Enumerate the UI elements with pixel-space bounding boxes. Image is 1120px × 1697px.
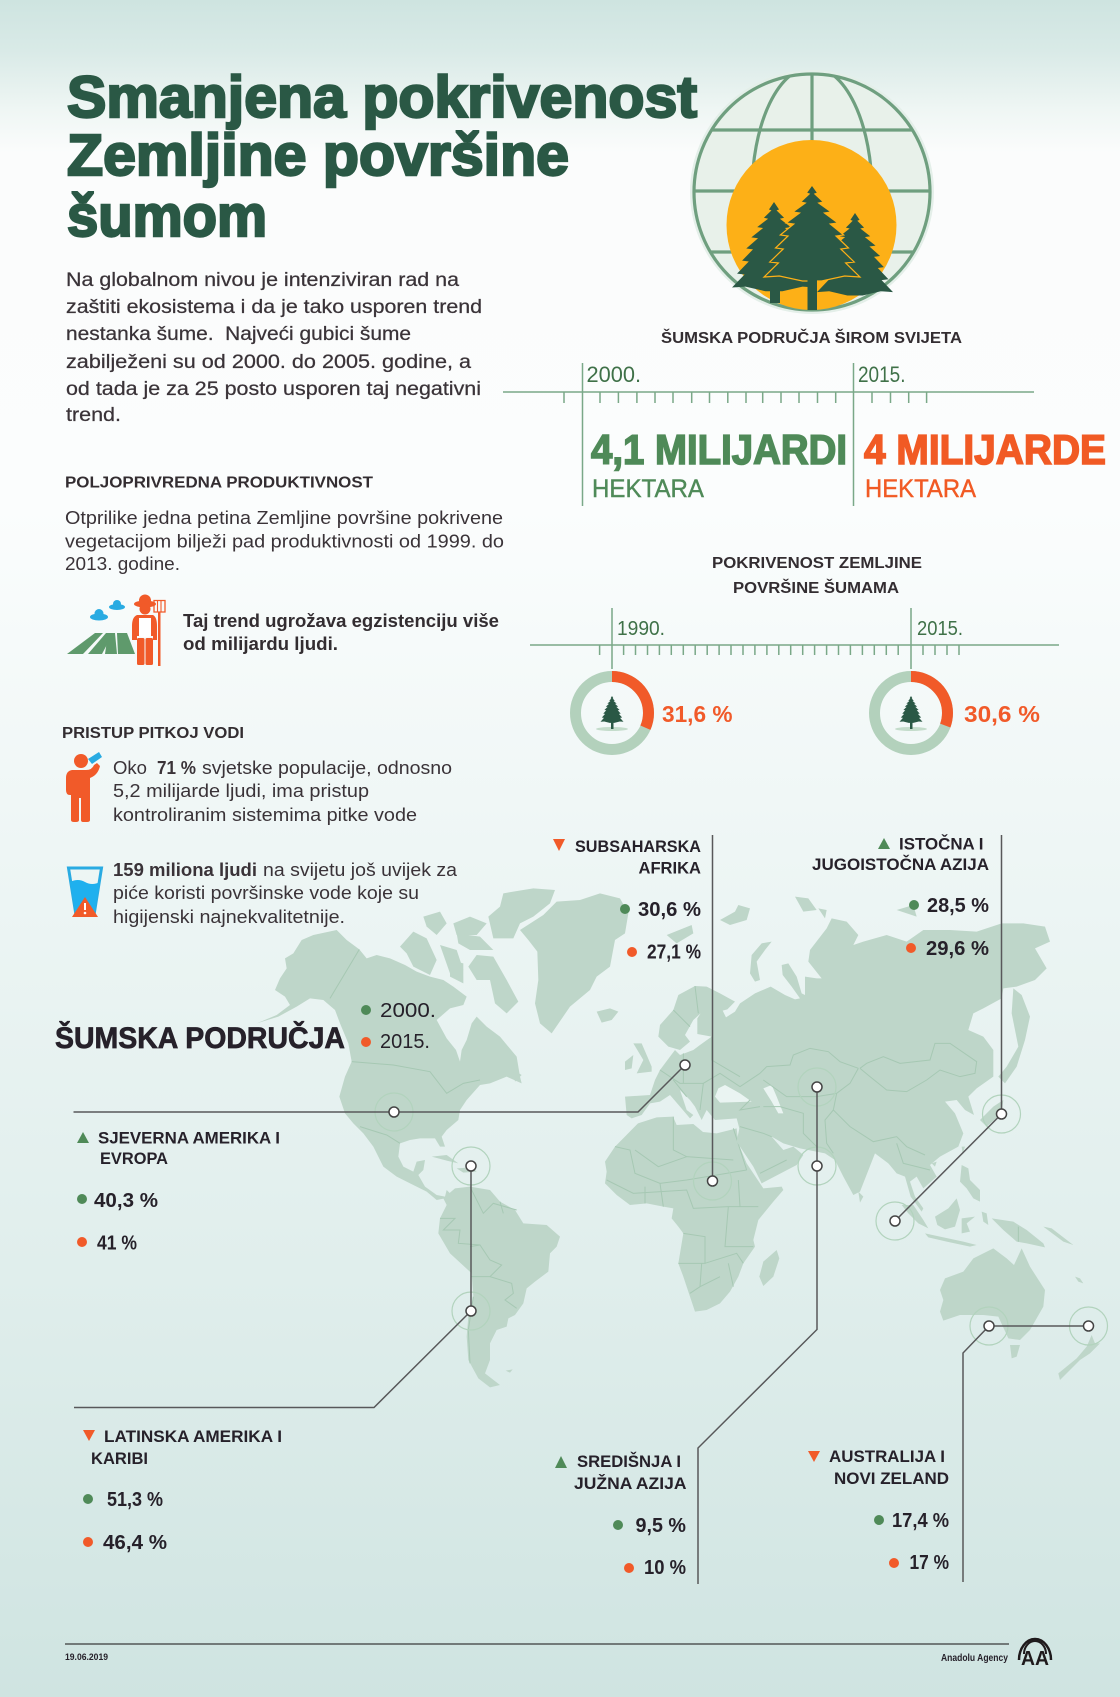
intro paragraph bbox=[66, 269, 482, 426]
region: East and Southeast Asia bbox=[812, 834, 989, 960]
water access text: svjetske populacije, odnosno bbox=[202, 758, 452, 778]
water access text: Oko bbox=[113, 758, 147, 778]
timeline 1990-2015: 1990. bbox=[617, 618, 665, 640]
heading: forest areas map: ŠUMSKA PODRUČJA bbox=[55, 1021, 345, 1055]
water access text: kontroliranim sistemima pitke vode bbox=[113, 805, 417, 825]
region: Sub-Saharan Africa bbox=[553, 837, 701, 964]
surface water text: 159 miliona ljudi bbox=[113, 860, 257, 880]
region: East and Southeast Asia: ISTOČNA I bbox=[899, 834, 984, 854]
region: Latin America and Caribbean: 51,3 % bbox=[107, 1489, 163, 1511]
region: East and Southeast Asia: 29,6 % bbox=[926, 938, 989, 960]
icon: Anadolu Agency logo bbox=[1019, 1639, 1051, 1670]
agriculture text: 2013. godine. bbox=[65, 554, 180, 574]
surface water text: higijenski najnekvalitetnije. bbox=[113, 907, 345, 927]
donut chart: 2015 bbox=[874, 676, 1040, 750]
region: East and Southeast Asia: JUGOISTOČNA AZIJA bbox=[812, 855, 989, 874]
region: Latin America and Caribbean: LATINSKA AMERIKA I bbox=[104, 1427, 282, 1446]
surface water text: na svijetu još uvijek za bbox=[263, 860, 458, 880]
icon: Anadolu Agency logo: AA bbox=[1021, 1648, 1049, 1670]
stat: 4.1 billion hectares: HEKTARA bbox=[592, 475, 704, 503]
heading: drinking water: PRISTUP PITKOJ VODI bbox=[62, 725, 244, 742]
heading: forest cover bbox=[712, 555, 922, 597]
region: North America and Europe: 41 % bbox=[97, 1232, 137, 1254]
stat: 4.1 billion hectares bbox=[591, 426, 847, 503]
heading: forest cover: POVRŠINE ŠUMAMA bbox=[733, 578, 899, 597]
region: North America and Europe bbox=[77, 1128, 280, 1254]
region: Central and South Asia: 9,5 % bbox=[636, 1515, 686, 1537]
region: Central and South Asia: 10 % bbox=[644, 1557, 686, 1579]
icon: globe with sun and trees bbox=[690, 67, 934, 317]
icon: water glass with warning bbox=[68, 868, 102, 917]
stat: 4.1 billion hectares: 4,1 MILIJARDI bbox=[591, 426, 847, 473]
agriculture text: vegetacijom bilježi pad produktivnosti od 1999. do bbox=[65, 532, 504, 552]
region: Latin America and Caribbean: 46,4 % bbox=[103, 1532, 167, 1554]
callout: threat to livelihoods bbox=[183, 611, 499, 654]
intro paragraph: zaštiti ekosistema i da je tako usporen trend bbox=[66, 296, 482, 318]
callout: threat to livelihoods: od milijardu ljudi. bbox=[183, 634, 338, 654]
region: East and Southeast Asia: 28,5 % bbox=[927, 895, 989, 917]
water access text: 71 % bbox=[157, 758, 196, 778]
intro paragraph: od tada je za 25 posto usporen taj negativni bbox=[66, 378, 481, 400]
heading: forest cover: POKRIVENOST ZEMLJINE bbox=[712, 555, 922, 572]
region: Sub-Saharan Africa: AFRIKA bbox=[638, 858, 701, 878]
stat: 4 billion hectares bbox=[864, 426, 1106, 503]
timeline 1990-2015: 2015. bbox=[917, 618, 963, 640]
title: Zemljine površine bbox=[67, 123, 569, 188]
agriculture text bbox=[65, 508, 504, 574]
region: Central and South Asia: JUŽNA AZIJA bbox=[574, 1474, 686, 1493]
footer: Anadolu Agency bbox=[941, 1653, 1008, 1664]
stat: 4 billion hectares: HEKTARA bbox=[865, 475, 976, 503]
intro paragraph: nestanka šume. Najveći gubici šume bbox=[66, 323, 411, 345]
icon: person drinking bbox=[66, 752, 102, 822]
surface water text: piće koristi površinske vode koje su bbox=[113, 883, 419, 903]
footer bbox=[65, 1644, 1009, 1664]
connector lines and map markers bbox=[74, 835, 1108, 1584]
region: Central and South Asia: SREDIŠNJA I bbox=[577, 1452, 681, 1471]
region: Latin America and Caribbean bbox=[83, 1427, 282, 1554]
map legend bbox=[361, 1000, 436, 1053]
callout: threat to livelihoods: Taj trend ugrožava egzistenciju više bbox=[183, 611, 499, 631]
region: North America and Europe: 40,3 % bbox=[94, 1190, 158, 1212]
icon: farmer and field bbox=[67, 594, 165, 666]
region: Australia and New Zealand: 17 % bbox=[910, 1552, 949, 1574]
region: Sub-Saharan Africa: SUBSAHARSKA bbox=[575, 837, 701, 856]
title bbox=[67, 65, 697, 249]
region: Central and South Asia bbox=[555, 1452, 686, 1579]
timeline 2000-2015 bbox=[503, 362, 1034, 506]
water access text: 5,2 milijarde ljudi, ima pristup bbox=[113, 781, 369, 801]
heading: forest areas worldwide: ŠUMSKA PODRUČJA ŠIROM SVIJETA bbox=[661, 328, 962, 347]
region: Sub-Saharan Africa: 30,6 % bbox=[638, 899, 701, 921]
region: Australia and New Zealand: NOVI ZELAND bbox=[834, 1469, 949, 1488]
water access text bbox=[113, 758, 452, 825]
region: Sub-Saharan Africa: 27,1 % bbox=[647, 942, 701, 964]
timeline 1990-2015 bbox=[530, 608, 1059, 669]
stat: 4 billion hectares: 4 MILIJARDE bbox=[864, 426, 1106, 473]
region: North America and Europe: SJEVERNA AMERIKA I bbox=[98, 1128, 280, 1148]
intro paragraph: trend. bbox=[66, 404, 121, 426]
map legend: 2015. bbox=[380, 1031, 430, 1053]
world map bbox=[257, 888, 1100, 1387]
region: Australia and New Zealand: AUSTRALIJA I bbox=[829, 1447, 945, 1466]
title: šumom bbox=[67, 184, 267, 249]
timeline 2000-2015: 2015. bbox=[858, 362, 906, 387]
intro paragraph: zabilježeni su od 2000. do 2005. godine, a bbox=[66, 351, 471, 373]
donut chart: 1990: 31,6 % bbox=[662, 701, 732, 727]
donut chart: 2015: 30,6 % bbox=[964, 701, 1040, 727]
map legend: 2000. bbox=[380, 1000, 436, 1022]
region: North America and Europe: EVROPA bbox=[100, 1149, 168, 1168]
timeline 2000-2015: 2000. bbox=[586, 362, 641, 387]
surface water text bbox=[113, 860, 458, 927]
footer: 19.06.2019 bbox=[65, 1652, 108, 1662]
title: Smanjena pokrivenost bbox=[67, 65, 697, 130]
region: Australia and New Zealand: 17,4 % bbox=[892, 1510, 949, 1532]
heading: agricultural productivity: POLJOPRIVREDNA PRODUKTIVNOST bbox=[65, 474, 373, 492]
region: Australia and New Zealand bbox=[808, 1447, 949, 1574]
agriculture text: Otprilike jedna petina Zemljine površine pokrivene bbox=[65, 508, 503, 528]
intro paragraph: Na globalnom nivou je intenziviran rad na bbox=[66, 269, 459, 291]
region: Latin America and Caribbean: KARIBI bbox=[91, 1449, 148, 1468]
donut chart: 1990 bbox=[576, 676, 732, 750]
